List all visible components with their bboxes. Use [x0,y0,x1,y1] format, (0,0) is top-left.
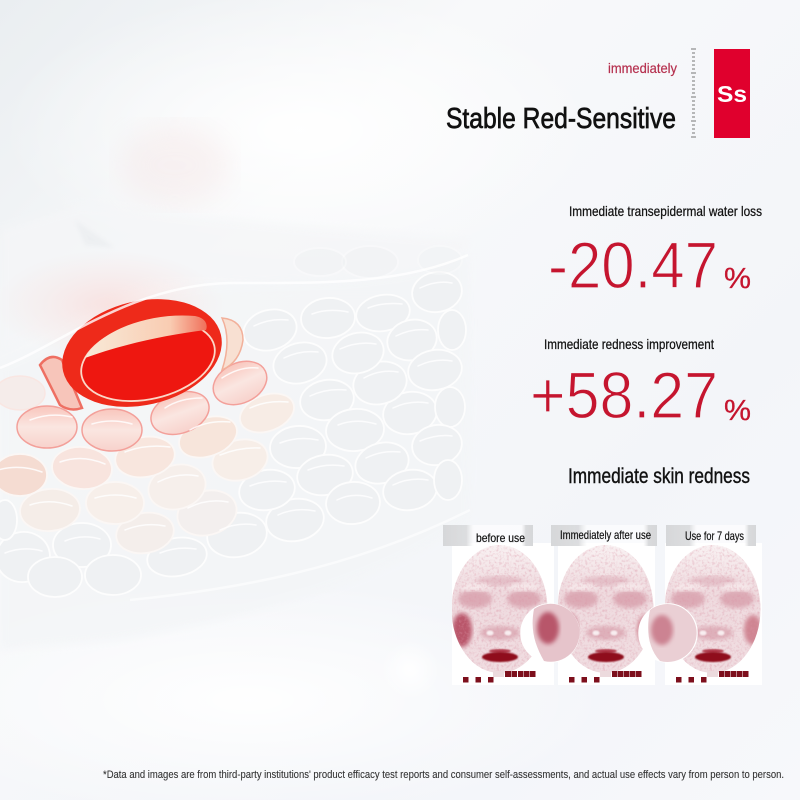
image: capsule film packet [0,125,470,650]
clear capsules [0,246,466,597]
heading: skin redness: Immediate skin redness [568,465,750,488]
capsule highlights [0,282,452,553]
comparison: immediately after use: Immediately after use [560,528,651,542]
stat: transepidermal water loss: Immediate transepidermal water loss [569,203,762,219]
background glow [0,0,610,800]
comparison: immediately after use [551,525,657,685]
ruler [691,49,696,137]
film pocket [0,253,470,650]
main red capsule [40,284,243,422]
red badge: Ss [717,81,747,107]
capsule highlight [85,315,207,358]
tag: immediately: immediately [608,60,677,76]
stat: redness improvement: % [724,395,751,427]
stat: transepidermal water loss: % [724,263,751,295]
stat: transepidermal water loss: -20.47 [548,228,718,302]
comparison: before use: before use [476,531,525,545]
red glow behind capsule [0,250,225,360]
magnifier: use for 7 days [639,604,697,662]
stat: redness improvement: +58.27 [530,358,718,432]
comparison: use for 7 days: Use for 7 days [685,529,744,543]
red badge [714,49,750,138]
peach capsules [0,387,299,558]
pink capsules near red capsule [0,353,274,451]
title: Stable Red-Sensitive [446,103,676,135]
stat: transepidermal water loss [548,203,762,302]
capsule tabs [40,318,243,409]
comparison: before use [443,525,554,685]
magnifier: before use [521,604,580,662]
film edge lines [0,255,470,600]
comparison: use for 7 days [665,525,762,685]
film top shape [0,125,470,350]
stat: redness improvement: Immediate redness improvement [544,336,714,352]
